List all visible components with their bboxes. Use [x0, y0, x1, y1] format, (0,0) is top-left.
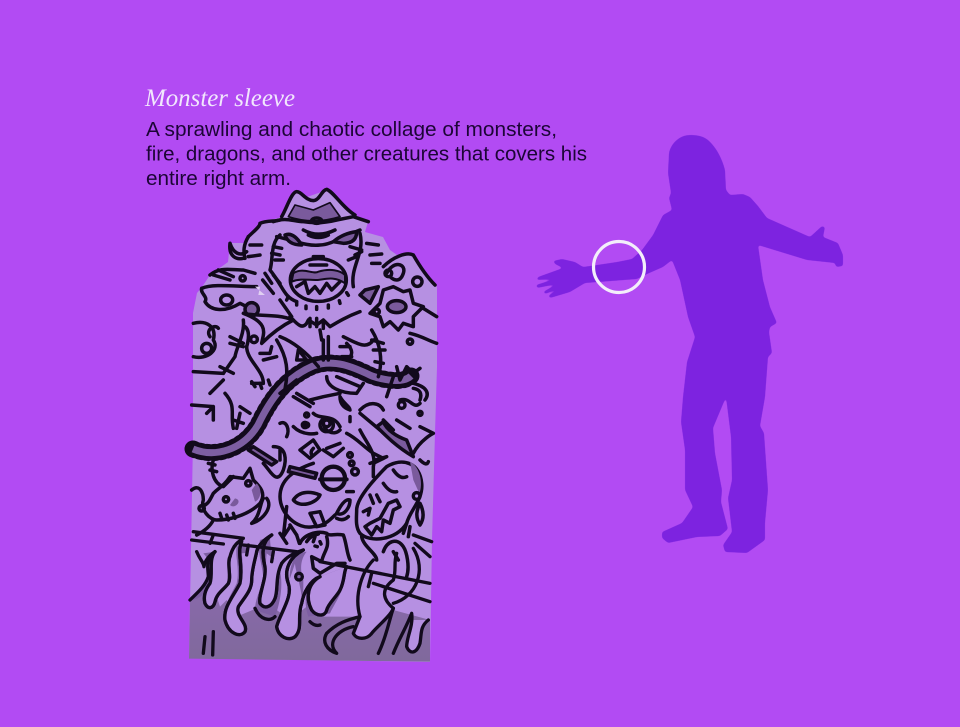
left rod and horn [248, 447, 277, 465]
tattoo skin panel [189, 190, 437, 662]
centre tusks [320, 330, 381, 377]
left beast [210, 269, 255, 275]
crown [282, 189, 355, 217]
upper monsters: crown, face, beasts, gear [192, 189, 437, 432]
lower monsters: creature, dragon skull [192, 420, 433, 577]
serpent tail [193, 363, 411, 453]
description text block: fire, dragons, and other creatures that covers his [146, 142, 587, 166]
right gear [360, 287, 378, 303]
description text block [146, 118, 587, 190]
centre creature [280, 463, 335, 537]
description text block: entire right arm. [146, 167, 291, 190]
face [277, 230, 360, 245]
fire shading and flames [189, 532, 432, 662]
dragon skull [356, 462, 422, 539]
description text block: A sprawling and chaotic collage of monsters, [146, 118, 557, 141]
location marker circle on forearm [594, 242, 644, 292]
figure silhouette with outstretched arms [536, 135, 843, 553]
under serpent [327, 377, 363, 410]
goblin above flames [300, 532, 350, 573]
heading: Monster sleeve: Monster sleeve [144, 83, 295, 112]
left animal [192, 468, 263, 520]
illustration: monster sleeve tattoo [189, 189, 437, 662]
